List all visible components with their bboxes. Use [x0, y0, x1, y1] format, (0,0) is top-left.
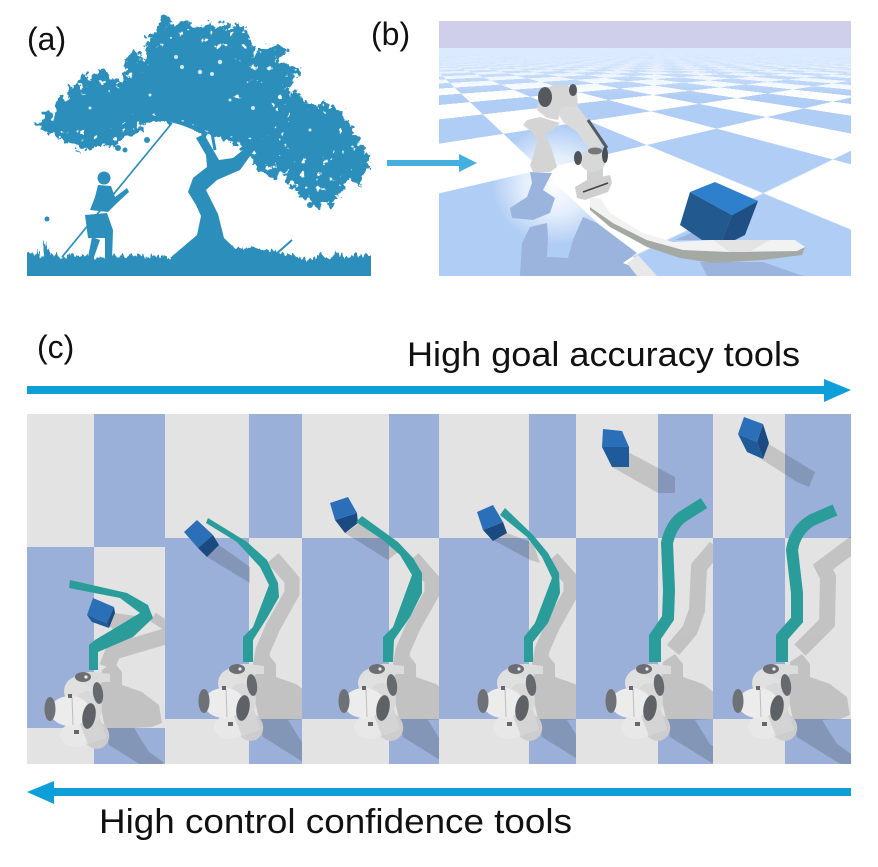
tool 3 — [356, 516, 422, 662]
rollout 4 — [439, 414, 576, 764]
label (b): (b) — [371, 16, 410, 52]
panel a: silhouette of person picking fruit from tree — [20, 15, 380, 284]
tree trunk — [170, 134, 256, 258]
main branch — [112, 116, 206, 138]
rollout 6 — [713, 414, 855, 770]
cube 4 — [477, 505, 507, 541]
panel c: six tool rollouts — [27, 414, 855, 778]
tool and cube shadow on floor — [675, 232, 803, 276]
gripper — [575, 175, 612, 200]
tool 6 — [782, 510, 835, 662]
robot shadow on floor — [510, 172, 637, 276]
panel b: simulation scene — [439, 21, 851, 276]
title: high goal accuracy tools: High goal accuracy tools — [407, 336, 800, 374]
title: high control confidence tools: High control confidence tools — [99, 803, 572, 841]
panel b: checkerboard floor — [439, 21, 851, 276]
floor glow — [496, 130, 596, 240]
cube 6 — [738, 417, 769, 459]
horizon haze — [439, 52, 851, 90]
tree crown — [35, 15, 370, 207]
robot arm — [523, 84, 612, 200]
rollout 1 — [27, 414, 170, 778]
fruit highlights — [88, 55, 312, 132]
tool 1 — [69, 580, 153, 670]
dense foliage core — [59, 44, 340, 159]
curved tool — [590, 198, 805, 263]
cube 5 — [602, 429, 629, 467]
person — [85, 172, 129, 260]
tool 4 — [500, 508, 560, 662]
cube 2 — [184, 520, 219, 557]
cube 3 — [330, 497, 358, 533]
hanging fruit — [44, 137, 362, 222]
sky — [439, 21, 851, 48]
upper branches — [210, 110, 290, 152]
rollout 5 — [576, 414, 713, 764]
tool 5 — [655, 503, 704, 662]
arrow: control confidence direction — [27, 781, 851, 804]
label (a): (a) — [27, 21, 66, 57]
picking pole — [62, 123, 172, 257]
tool 2 — [206, 518, 279, 662]
rollout 2 — [165, 414, 302, 764]
rollout 3 — [302, 414, 439, 764]
grass and ground — [27, 240, 371, 276]
cube 1 — [87, 598, 115, 628]
arrow: goal accuracy direction — [27, 379, 851, 402]
right side twig — [275, 240, 292, 255]
arrow: a to b — [387, 154, 477, 172]
label (c): (c) — [37, 329, 74, 365]
blue cube — [680, 182, 758, 240]
